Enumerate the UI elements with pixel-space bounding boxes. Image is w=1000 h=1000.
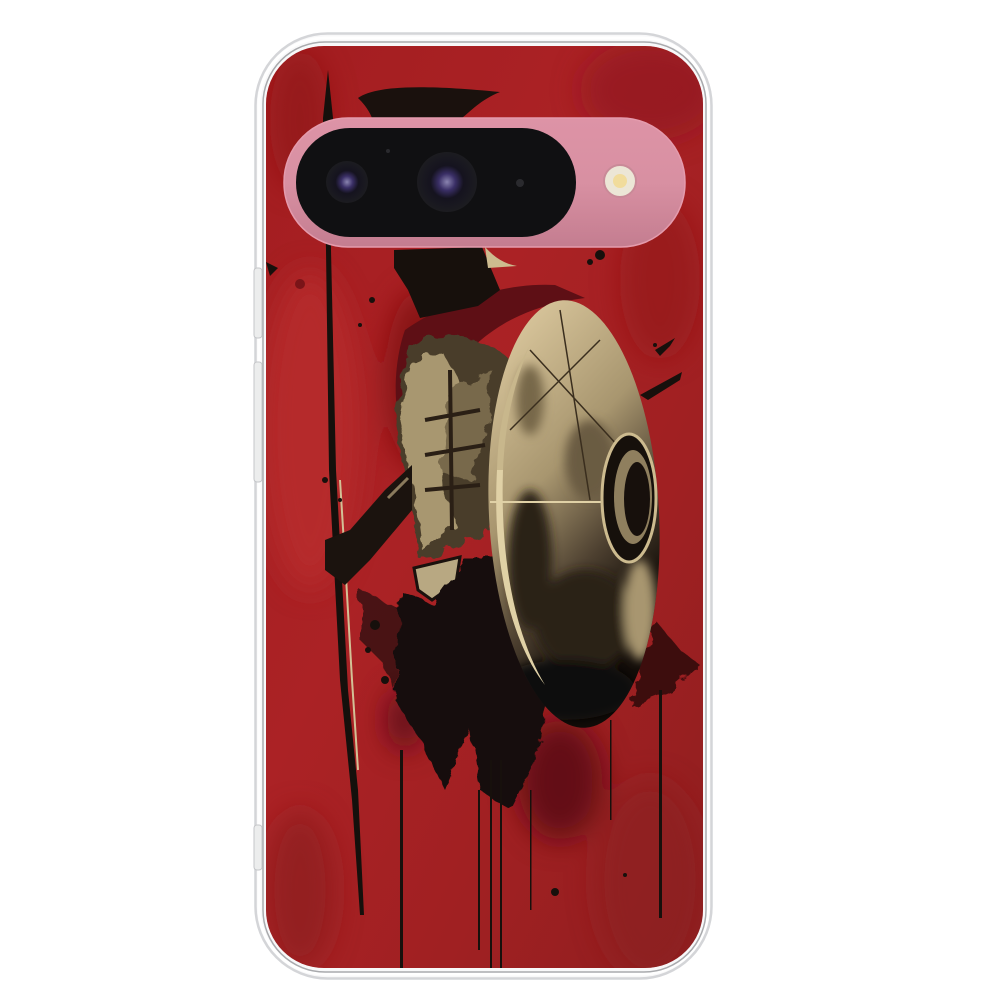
camera bar (284, 118, 685, 247)
side buttons on case (254, 268, 262, 870)
belt piece (414, 557, 460, 600)
helmet (394, 247, 500, 318)
ink splatter (266, 250, 700, 970)
sensor dots (386, 149, 524, 187)
warrior body (325, 247, 585, 810)
shield (488, 300, 660, 728)
shield boss (602, 434, 656, 562)
lens centre (417, 152, 477, 212)
skirt (395, 560, 550, 810)
spear shaft (323, 70, 364, 915)
cape (396, 285, 585, 425)
flash (604, 165, 636, 197)
arm (325, 465, 412, 585)
phone case product illustration (254, 32, 713, 980)
helmet crest (358, 87, 500, 118)
camera lens housing (296, 128, 576, 237)
lens left (326, 161, 368, 203)
torso (395, 336, 510, 560)
clear case outer shell (256, 34, 712, 978)
red printed back panel (260, 40, 720, 980)
texture: paint patches (260, 40, 720, 980)
